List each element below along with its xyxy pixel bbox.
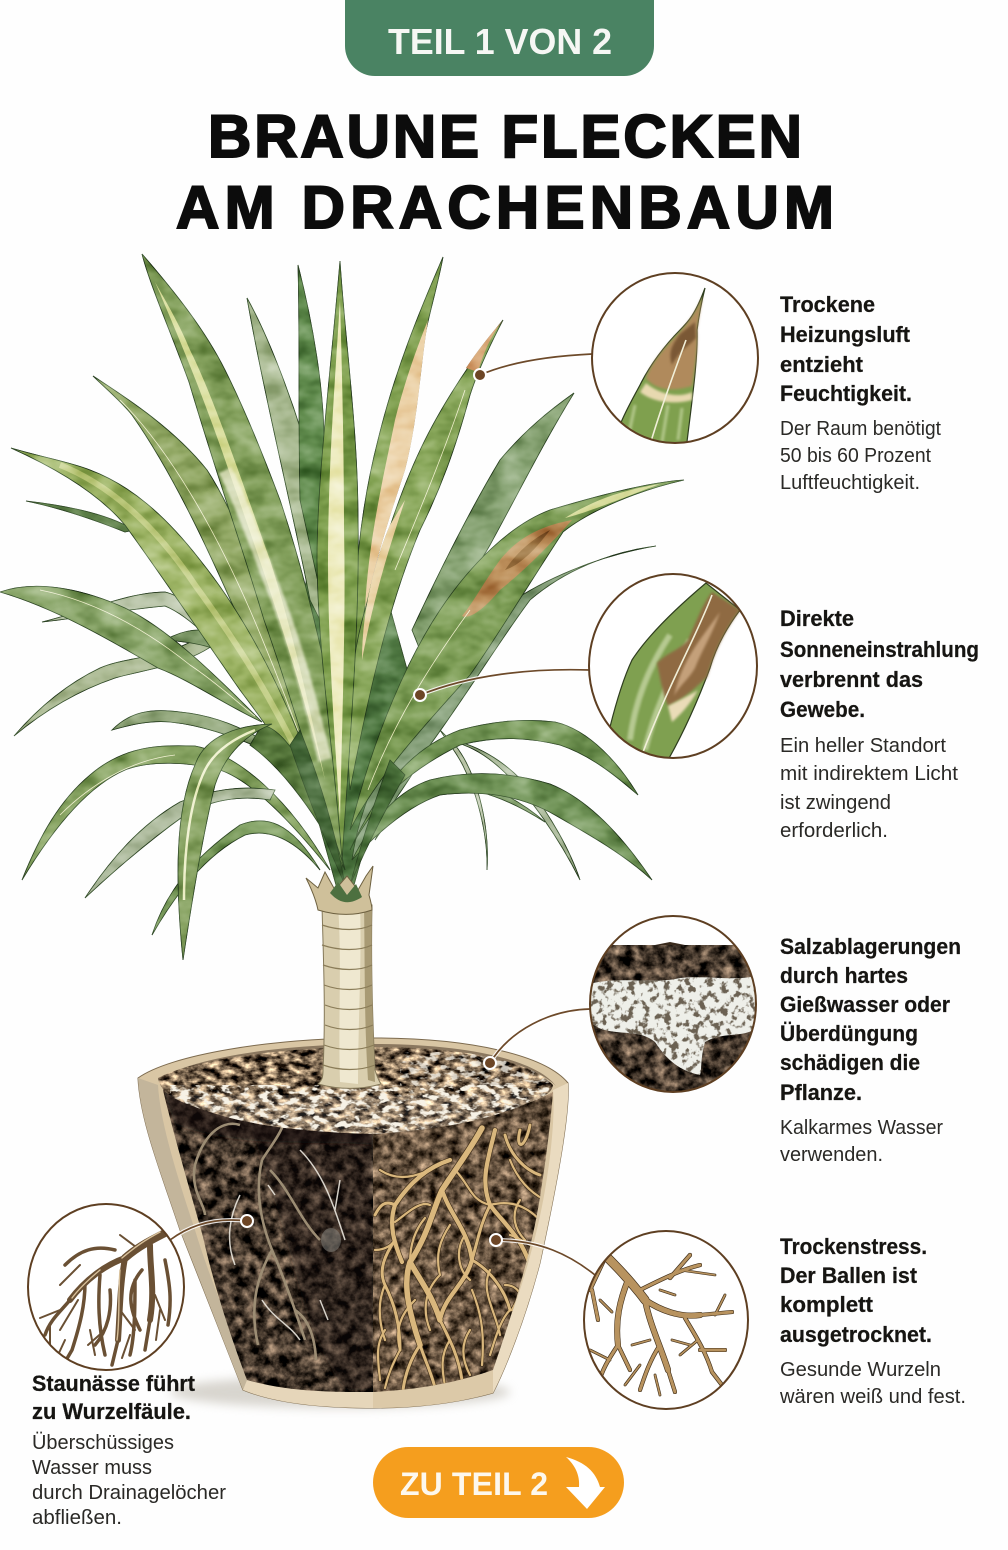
title: BRAUNE FLECKEN [208,103,802,170]
title: AM DRACHENBAUM [176,174,834,241]
callout 4: drought-stressed roots [490,1231,748,1409]
right half: dry soil and pale roots [373,1092,553,1392]
soil surface with salt crust [158,1047,553,1134]
callout 1: dry tip [474,273,758,450]
callout 3 text [780,934,961,1166]
callout 3 text: verwenden. [780,1144,883,1166]
callout 4 text [779,1234,966,1408]
callout 5 text [32,1371,226,1529]
button: Zu Teil 2: ZU TEIL 2 [400,1466,548,1502]
callout 3 text: Überdüngung [780,1021,918,1046]
magnifier: rotten root [28,1204,184,1370]
callout 3 text: Kalkarmes Wasser [780,1117,943,1139]
callout 4 text: komplett [780,1292,873,1317]
callout 2 text: Gewebe. [780,697,865,722]
callout 5 text: zu Wurzelfäule. [32,1399,191,1424]
callout 4 text: wären weiß und fest. [779,1386,966,1408]
callout 2 text: verbrennt das [780,667,923,692]
callout 4 text: Trockenstress. [780,1234,927,1259]
connector line 3 [484,1009,590,1069]
callout 1 text: Der Raum benötigt [780,418,941,440]
callout 5 text: abfließen. [32,1507,122,1529]
callout 1 text: entzieht [780,352,863,377]
callout 2: sunburn [414,574,757,760]
tab: Teil 1 von 2 [345,0,654,76]
callout 1 text: Feuchtigkeit. [780,381,912,406]
callout 5 text: Wasser muss [32,1457,152,1479]
callout 3 text: Salzablagerungen [780,934,961,959]
connector line 1 [474,354,592,381]
magnifier: salt crust in soil [585,916,761,1100]
magnifier: browned leaf tip [592,273,758,450]
callout 1 text: Trockene [780,292,875,317]
callout 2 text: mit indirektem Licht [780,763,958,785]
illustration: pot cross-section [138,1038,568,1408]
callout 1 text: Luftfeuchtigkeit. [780,472,920,494]
callout 2 text: ist zwingend [780,792,891,814]
callout 3 text: schädigen die [780,1050,920,1075]
connector line 2 [414,670,590,701]
callout 4 text: Der Ballen ist [780,1263,917,1288]
callout 5: root rot [28,1204,253,1370]
callout 4 text: ausgetrocknet. [780,1322,932,1347]
callout 5 text: Überschüssiges [32,1432,174,1454]
illustration: plant leaves [0,254,684,960]
callout 2 text: Sonneneinstrahlung [780,637,979,662]
callout 1 text: Heizungsluft [780,322,910,347]
callout 5 text: Staunässe führt [32,1371,195,1396]
callout 2 text: erforderlich. [780,820,888,842]
illustration: trunk and crown [306,866,381,1088]
callout 3 text: durch hartes [780,963,908,988]
tab: Teil 1 von 2: TEIL 1 VON 2 [388,21,612,62]
callout 5 text: durch Drainagelöcher [32,1482,226,1504]
magnifier: dry root [584,1231,748,1409]
callout 2 text: Ein heller Standort [780,735,946,757]
callout 2 text: Direkte [780,606,854,631]
icon: curved arrow down [566,1457,605,1509]
callout 1 text: 50 bis 60 Prozent [780,445,931,467]
button: Zu Teil 2 [373,1447,624,1518]
callout 3 text: Gießwasser oder [780,992,950,1017]
callout 3: salt deposits [484,916,761,1100]
callout 3 text: Pflanze. [780,1080,862,1105]
connector line 4 [490,1234,595,1275]
magnifier: sunburnt leaf [589,574,757,760]
left half: waterlogged soil and rotten roots [163,1090,373,1392]
callout 1 text [780,292,941,494]
callout 4 text: Gesunde Wurzeln [780,1359,941,1381]
title [176,103,834,241]
callout 2 text [780,606,979,842]
connector line 5 [170,1215,253,1240]
